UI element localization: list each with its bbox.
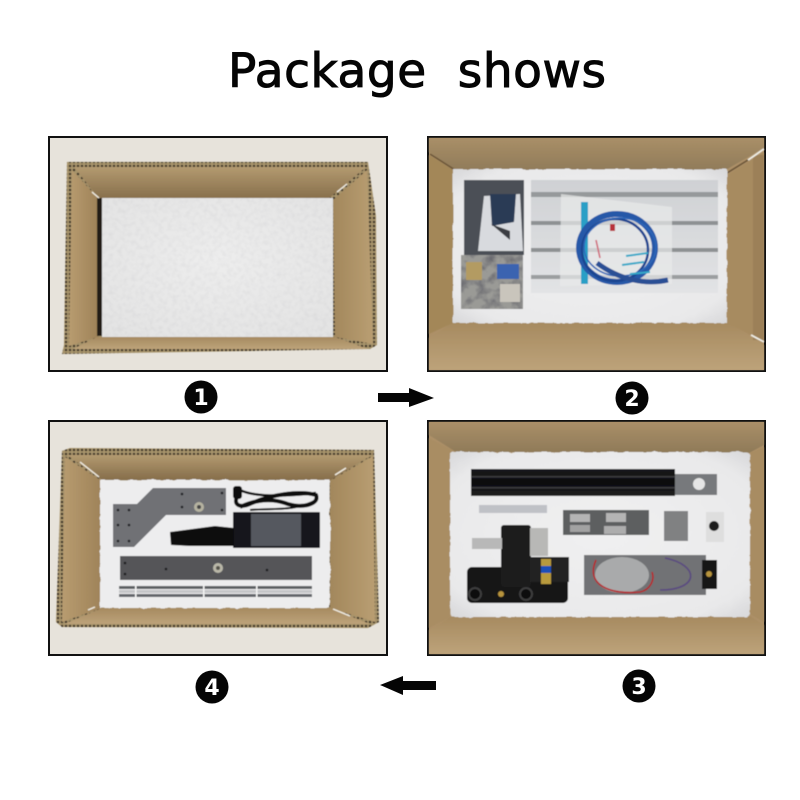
white slits — [748, 149, 764, 342]
angled metal plate — [113, 488, 226, 547]
foam texture — [102, 198, 333, 337]
left flap — [69, 170, 98, 346]
hardware tray — [675, 474, 717, 495]
right flap edge strip — [753, 155, 764, 340]
bracket tray — [664, 511, 688, 541]
marker 1: 1 — [193, 386, 209, 411]
adapter cable bundle — [170, 526, 234, 546]
plastic bag — [560, 194, 672, 286]
left flap — [429, 155, 455, 334]
corner slits — [92, 184, 347, 198]
marker 2 — [616, 382, 648, 414]
bottom flap — [429, 616, 764, 654]
arrow right — [378, 388, 434, 407]
panel 4: bracket plate, power adapter and rods — [49, 421, 387, 655]
box outer edge — [62, 162, 377, 354]
right flap — [333, 170, 373, 344]
marker 4: 4 — [204, 676, 220, 701]
blue cable coil — [579, 214, 655, 282]
panel 2: cables, aluminium plate and parts bags — [428, 137, 765, 371]
top flap — [67, 455, 372, 480]
right flap — [750, 447, 764, 622]
bottom flap — [64, 608, 370, 624]
foam — [100, 480, 330, 608]
hardware bag — [461, 255, 523, 309]
marker 2: 2 — [624, 387, 640, 412]
long flat metal bar — [120, 556, 312, 580]
wiring tray — [584, 555, 706, 595]
top flap — [429, 422, 764, 453]
foam sheet — [102, 198, 333, 337]
laser head assembly — [467, 525, 569, 603]
title: Package shows — [228, 44, 606, 99]
corner slits — [80, 462, 350, 616]
plug — [233, 486, 242, 499]
marker 3: 3 — [631, 675, 647, 700]
top flap — [429, 138, 764, 172]
right flap — [727, 152, 764, 342]
smooth rods — [119, 586, 312, 597]
marker 4 — [196, 670, 228, 704]
small rod piece — [479, 505, 547, 513]
rod ties — [135, 585, 258, 598]
box outer edge — [56, 448, 379, 628]
arrow left — [380, 676, 436, 695]
panel 1: box with foam sheet — [49, 137, 387, 371]
cable label marks — [622, 253, 650, 274]
left flap — [62, 457, 102, 622]
bottom flap — [73, 337, 368, 349]
power adapter — [233, 512, 320, 548]
stepper plate — [706, 512, 724, 542]
marker 3 — [622, 670, 656, 702]
aluminium plate — [531, 180, 718, 293]
right flap — [330, 456, 375, 622]
bearings tray — [563, 510, 649, 535]
left shadow — [97, 198, 103, 336]
top flap — [74, 167, 366, 200]
mains cable and plug — [236, 490, 317, 510]
bottom flap — [429, 322, 764, 370]
black extrusion — [471, 469, 675, 496]
silver antistatic bag — [464, 180, 524, 255]
foam — [453, 169, 727, 323]
marker 1 — [184, 380, 218, 414]
panel 3: linear rail, motor and components — [428, 421, 765, 655]
left flap — [429, 438, 456, 628]
foam — [450, 452, 750, 617]
